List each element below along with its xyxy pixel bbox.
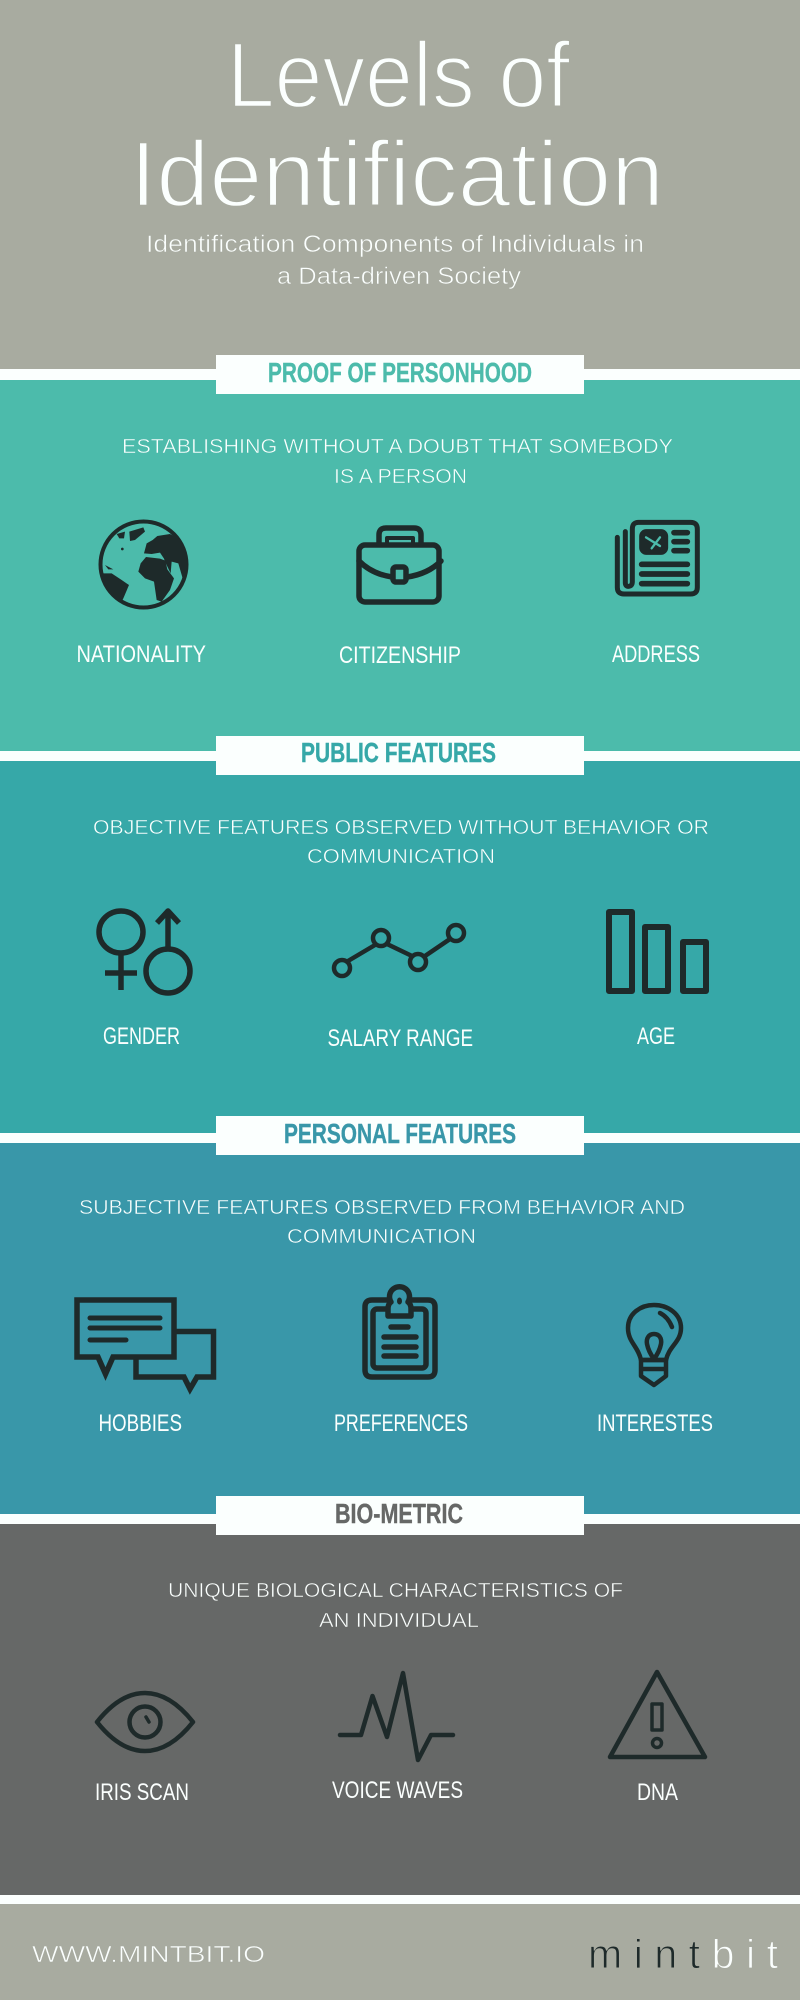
title: Levels of [227, 23, 570, 127]
label: gender: GENDER [103, 1023, 180, 1050]
description: bio-metric: AN INDIVIDUAL [319, 1609, 479, 1632]
label: nationality: NATIONALITY [76, 641, 206, 668]
icon: line chart [334, 925, 464, 976]
description: bio-metric [168, 1579, 623, 1632]
label: voice waves: VOICE WAVES [332, 1777, 463, 1804]
icon: briefcase [359, 528, 441, 602]
panel: personal features [0, 1116, 800, 1514]
label: hobbies: HOBBIES [98, 1410, 182, 1437]
subtitle: a Data-driven Society [277, 263, 521, 290]
panel: header [0, 0, 800, 369]
label: citizenship: CITIZENSHIP [339, 642, 461, 669]
section tab: bio-metric [216, 1496, 584, 1535]
subtitle: Identification Components of Individuals in [146, 231, 644, 258]
icon: voice wave [340, 1673, 453, 1760]
description: proof of personhood: IS A PERSON [334, 465, 467, 488]
footer website: WWW.MINTBIT.IO [32, 1941, 265, 1967]
description: public features: COMMUNICATION [307, 845, 495, 868]
icon: newspaper [617, 522, 697, 594]
section tab: public features: PUBLIC FEATURES [301, 737, 496, 768]
description: public features [93, 816, 709, 868]
label: iris scan: IRIS SCAN [95, 1779, 189, 1806]
description: personal features: COMMUNICATION [287, 1225, 476, 1248]
description: personal features [79, 1196, 685, 1248]
icon: globe [100, 522, 187, 608]
panel: bio-metric [0, 1496, 800, 1895]
title: Identification [130, 122, 664, 226]
icon: eye [97, 1693, 193, 1751]
footer logo: mint bit [588, 1931, 779, 1977]
section tab: public features [216, 736, 584, 775]
description: proof of personhood: ESTABLISHING WITHOUT A DOUBT THAT SOMEBODY [122, 435, 673, 458]
subtitle [146, 231, 644, 290]
description: proof of personhood [122, 435, 673, 488]
section tab: personal features [216, 1116, 584, 1155]
icon: clipboard [365, 1287, 435, 1377]
label: dna: DNA [637, 1779, 679, 1806]
title [130, 23, 664, 226]
panel: proof of personhood [0, 355, 800, 751]
section tab: proof of personhood [216, 355, 584, 394]
label: interestes: INTERESTES [597, 1410, 713, 1437]
section tab: bio-metric: BIO-METRIC [335, 1498, 463, 1529]
icon: warning triangle [610, 1672, 705, 1757]
label: address: ADDRESS [612, 641, 700, 668]
description: bio-metric: UNIQUE BIOLOGICAL CHARACTERISTICS OF [168, 1579, 623, 1602]
icon: bar chart [609, 912, 706, 991]
label: salary range: SALARY RANGE [328, 1025, 473, 1052]
section tab: proof of personhood: PROOF OF PERSONHOOD [268, 357, 532, 388]
icon: speech bubbles [77, 1300, 214, 1389]
panel: public features [0, 736, 800, 1133]
icon: light bulb [628, 1305, 681, 1385]
icon: gender symbols [99, 911, 190, 993]
description: public features: OBJECTIVE FEATURES OBSERVED WITHOUT BEHAVIOR OR [93, 816, 709, 839]
section tab: personal features: PERSONAL FEATURES [284, 1118, 516, 1149]
label: age: AGE [637, 1023, 675, 1050]
description: personal features: SUBJECTIVE FEATURES OBSERVED FROM BEHAVIOR AND [79, 1196, 685, 1219]
panel: footer [0, 1895, 800, 2000]
label: preferences: PREFERENCES [334, 1410, 468, 1437]
